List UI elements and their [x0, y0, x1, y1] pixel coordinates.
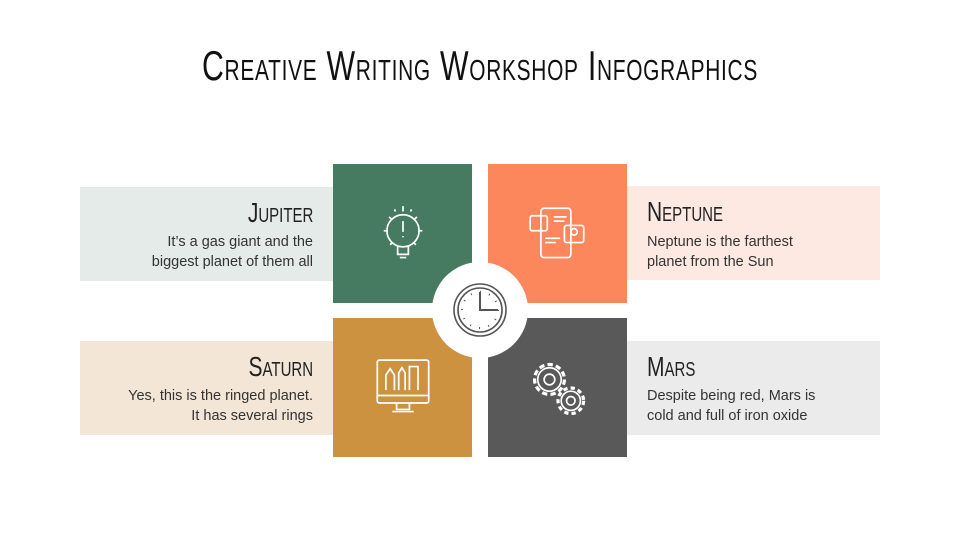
panel: neptune	[627, 186, 880, 280]
text: saturn: Yes, this is the ringed planet.	[128, 388, 313, 404]
icon: gears	[532, 362, 586, 416]
square: orange	[488, 164, 627, 303]
icon: phone chat	[529, 207, 585, 258]
heading: mars: Mars	[647, 351, 695, 382]
text: jupiter: biggest planet of them all	[152, 254, 313, 270]
panel: jupiter	[80, 187, 333, 281]
square: gold	[333, 318, 472, 457]
text: mars: Despite being red, Mars is	[647, 388, 815, 404]
text: neptune: planet from the Sun	[647, 254, 774, 270]
square: gray	[488, 318, 627, 457]
text: jupiter	[152, 234, 313, 270]
heading: jupiter: Jupiter	[247, 197, 313, 228]
text: neptune	[647, 234, 793, 270]
text: saturn	[128, 388, 313, 424]
square: green	[333, 164, 472, 303]
icon: design monitor	[376, 359, 430, 412]
heading: neptune: Neptune	[647, 196, 723, 227]
panel: saturn	[80, 341, 333, 435]
center circle with clock	[432, 262, 528, 358]
text: mars: cold and full of iron oxide	[647, 408, 807, 424]
title: Creative Writing Workshop Infographics	[202, 42, 758, 89]
icon: lightbulb	[384, 206, 422, 258]
text: mars	[647, 388, 815, 424]
icon: clock	[453, 283, 507, 337]
text: saturn: It has several rings	[191, 408, 313, 424]
text: neptune: Neptune is the farthest	[647, 234, 793, 250]
text: jupiter: It’s a gas giant and the	[167, 234, 313, 250]
heading: saturn: Saturn	[248, 351, 313, 382]
panel: mars	[627, 341, 880, 435]
